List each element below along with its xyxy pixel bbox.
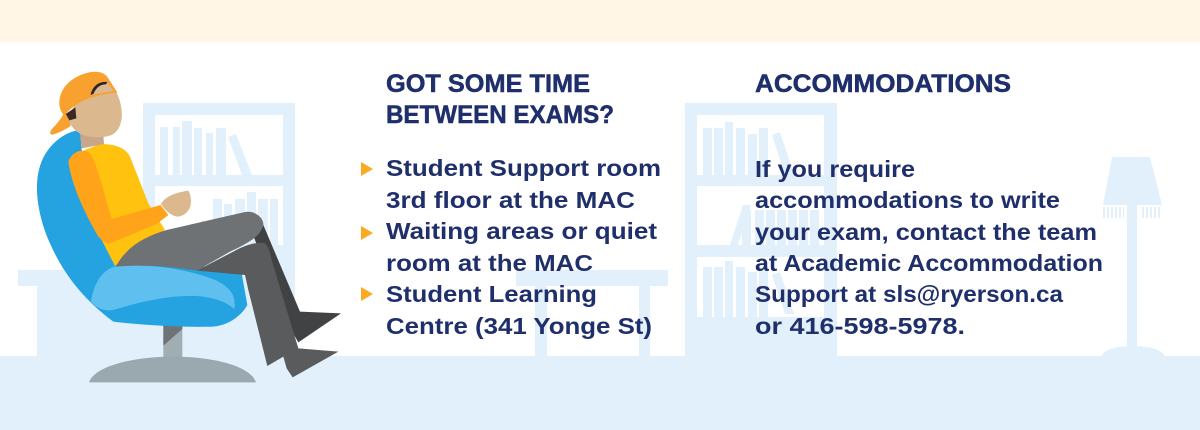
item 2: Waiting areas or quiet xyxy=(386,218,657,244)
arm xyxy=(68,151,168,243)
accommodations paragraph: If you require xyxy=(755,156,915,182)
list of places xyxy=(361,155,661,339)
neck xyxy=(80,132,104,148)
bullet 2 xyxy=(361,226,373,240)
accommodations paragraph: Support at sls@ryerson.ca xyxy=(755,281,1063,307)
bookshelf left xyxy=(143,103,295,357)
item 3: Centre (341 Yonge St) xyxy=(386,313,652,339)
chair pedestal xyxy=(89,323,256,382)
chair body xyxy=(37,130,247,327)
hand xyxy=(161,191,191,217)
item 1 xyxy=(386,155,661,213)
accommodations paragraph xyxy=(755,156,1103,339)
top band xyxy=(0,0,1200,42)
item 3: Student Learning xyxy=(386,281,597,307)
item 2 xyxy=(386,218,657,276)
item 1: 3rd floor at the MAC xyxy=(386,187,635,213)
heading: got some time xyxy=(386,70,614,129)
shirt xyxy=(80,144,165,266)
heading: got some time: BETWEEN EXAMS? xyxy=(386,101,614,129)
table left xyxy=(18,270,148,356)
person sitting in chair xyxy=(37,72,341,382)
table centre xyxy=(516,270,668,356)
item 3 xyxy=(386,281,652,339)
item 2: room at the MAC xyxy=(386,250,593,276)
hair xyxy=(66,107,76,120)
bookshelf right xyxy=(685,103,837,357)
accommodations paragraph: accommodations to write xyxy=(755,187,1060,213)
bullet 1 xyxy=(361,162,373,176)
cap strap opening xyxy=(91,82,114,95)
room background silhouettes xyxy=(0,103,1200,430)
accommodations paragraph: at Academic Accommodation xyxy=(755,250,1103,276)
accommodations paragraph: or 416-598-5978. xyxy=(755,313,965,339)
back leg xyxy=(250,225,341,342)
heading: accommodations: ACCOMMODATIONS xyxy=(755,70,1011,98)
accommodations paragraph: your exam, contact the team xyxy=(755,219,1097,245)
hair in strap opening xyxy=(91,82,107,95)
heading: got some time: GOT SOME TIME xyxy=(386,70,590,98)
floor xyxy=(0,356,1200,430)
item 1: Student Support room xyxy=(386,155,661,181)
bullet 3 xyxy=(361,287,373,301)
cap xyxy=(50,72,117,135)
chair cushion xyxy=(91,266,235,310)
front leg and foot xyxy=(197,243,338,377)
head xyxy=(68,88,122,137)
floor lamp xyxy=(1102,157,1164,366)
thigh xyxy=(116,212,263,271)
